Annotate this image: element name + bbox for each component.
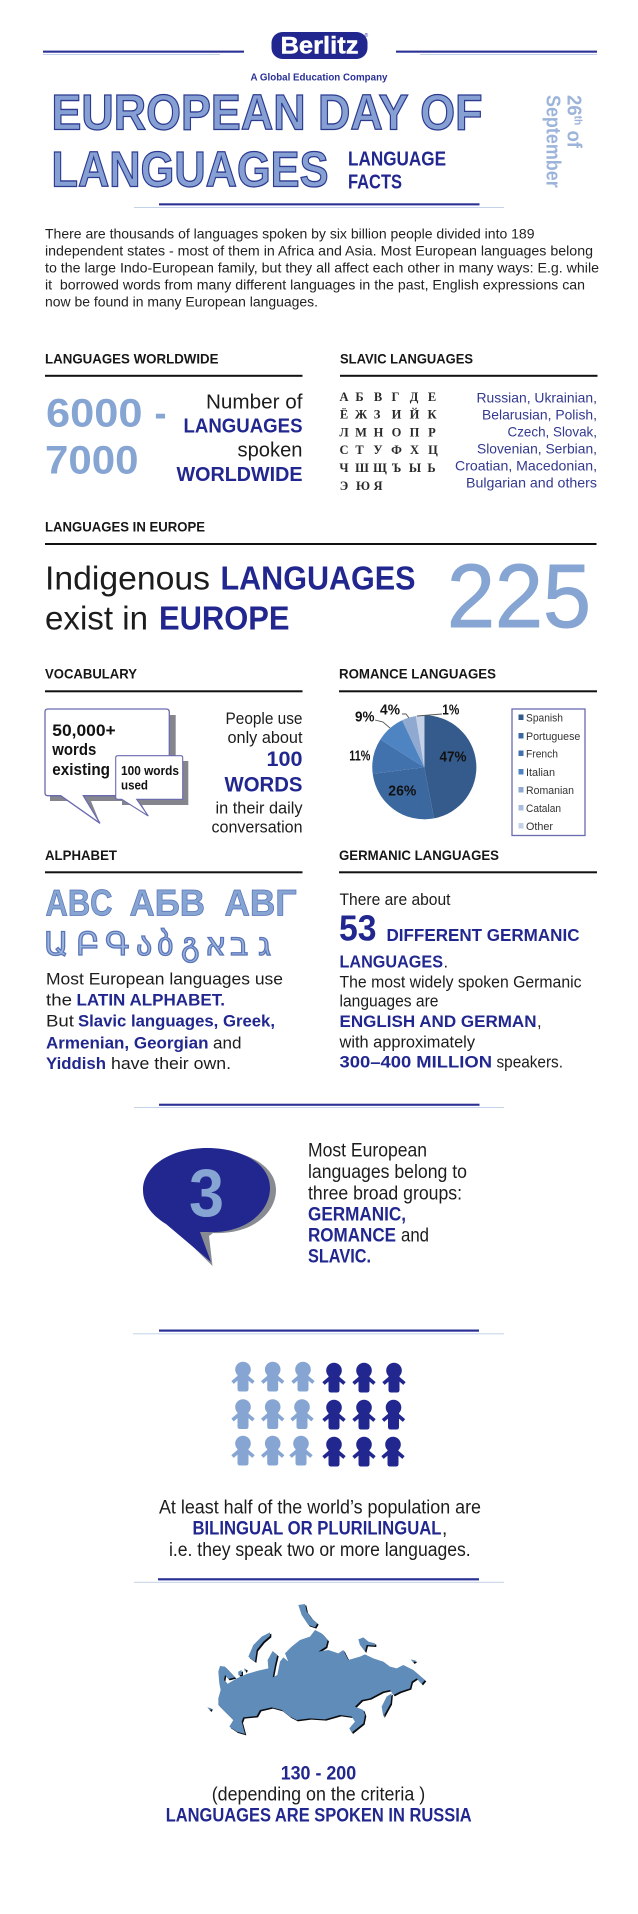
panel: languages worldwide [45, 350, 303, 486]
legend: Italian [526, 767, 555, 779]
outlined alphabets row 2: ב [230, 925, 248, 963]
cyrillic alphabet [339, 390, 438, 493]
statement: LANGUAGES [220, 560, 416, 597]
text block: 300–400 MILLION [340, 1053, 492, 1071]
caption: People use [226, 710, 302, 728]
text: Most European [308, 1140, 427, 1162]
legend: Portuguese [526, 731, 580, 743]
text block: languages are [340, 993, 438, 1011]
cyrillic alphabet: ЧШЩЪЫЬ [339, 461, 436, 475]
pie chart [349, 702, 476, 819]
caption [212, 710, 303, 836]
panel: vocabulary [45, 666, 303, 836]
outlined alphabets row 2: ბ [157, 925, 174, 963]
speech bubble large: 50,000+ [52, 722, 116, 740]
caption: conversation [212, 818, 302, 836]
outlined alphabets row 2: გ [181, 925, 200, 963]
caption: WORDS [224, 774, 302, 797]
pie chart: 1% [442, 702, 459, 718]
description: LANGUAGES [184, 415, 302, 437]
text: , [442, 1518, 447, 1539]
text: ROMANCE [308, 1225, 396, 1247]
text: BILINGUAL OR PLURILINGUAL [192, 1518, 442, 1539]
cyrillic alphabet: АБВГДЕ [339, 390, 436, 404]
statement: EUROPE [159, 600, 290, 637]
cyrillic alphabet: ЛМНОПР [339, 426, 436, 440]
panel: languages in russia [166, 1604, 472, 1827]
text block: The most widely spoken Germanic [340, 973, 582, 991]
text [166, 1762, 472, 1827]
subtitle: language facts [348, 148, 446, 193]
heading: LANGUAGES IN EUROPE [45, 519, 205, 535]
panel: languages in europe [45, 519, 596, 647]
intro paragraph: to the large Indo-European family, but they all affect each other in many ways: E.g. while [45, 260, 599, 276]
slavic language list: Slovenian, Serbian, [477, 440, 597, 456]
description [46, 969, 283, 1073]
text: SLAVIC. [308, 1246, 371, 1268]
description: Armenian, Georgian [46, 1033, 208, 1052]
outlined alphabets row 1 [46, 883, 296, 924]
icon: speech bubble with 3: 3 [189, 1155, 224, 1231]
date: 26th of September [542, 95, 584, 188]
slavic language list: Bulgarian and others [466, 474, 597, 490]
text block: . [444, 954, 448, 972]
legend: Romanian [526, 785, 574, 797]
heading: ALPHABET [45, 847, 117, 863]
caption: in their daily [216, 799, 303, 817]
heading: LANGUAGES WORLDWIDE [45, 350, 218, 366]
description: But [46, 1012, 74, 1031]
slavic language list: Croatian, Macedonian, [455, 457, 597, 473]
text [308, 1140, 467, 1268]
text block [339, 891, 582, 1071]
text block: , [537, 1013, 542, 1031]
header: logo and top rules [43, 32, 597, 59]
description: LATIN ALPHABET. [76, 991, 225, 1010]
text block: LANGUAGES [340, 952, 443, 972]
speech bubble small: 100 words [121, 764, 179, 778]
caption: 100 [266, 748, 302, 771]
heading: ROMANCE LANGUAGES [339, 666, 496, 682]
text block: ENGLISH AND GERMAN [340, 1013, 536, 1031]
speech bubble small: used [121, 778, 148, 792]
text block: speakers. [496, 1053, 563, 1071]
logo: Berlitz: ® [364, 32, 368, 39]
slavic language list: Russian, Ukrainian, [476, 389, 597, 405]
heading: GERMANIC LANGUAGES [339, 847, 499, 863]
pie chart: 11% [349, 748, 370, 764]
pie chart: 4% [380, 702, 400, 718]
pie chart: 26% [388, 784, 416, 800]
legend: French [526, 748, 558, 760]
outlined alphabets row 2 [44, 925, 271, 963]
date: 26th of September: 26 [562, 95, 584, 117]
cyrillic alphabet: СТУФХЦ [339, 443, 438, 457]
text block: with approximately [339, 1033, 476, 1051]
panel: romance languages [339, 666, 597, 836]
legend: Catalan [526, 803, 561, 815]
title [52, 83, 482, 197]
heading: VOCABULARY [45, 666, 138, 682]
text: LANGUAGES ARE SPOKEN IN RUSSIA [166, 1805, 472, 1827]
title: EUROPEAN DAY OF [52, 83, 482, 140]
description: the [46, 991, 72, 1010]
heading: SLAVIC LANGUAGES [340, 350, 473, 366]
description: Slavic languages, Greek, [78, 1012, 275, 1031]
outlined alphabets row 2: Բ [76, 925, 99, 963]
description: Yiddish [46, 1054, 106, 1073]
legend: Other [526, 821, 553, 833]
subtitle: language facts: LANGUAGE [348, 148, 446, 171]
logo: Berlitz: Berlitz [280, 32, 358, 59]
outlined alphabets row 1: ΑΒΓ [224, 883, 296, 924]
speech bubble small [116, 756, 188, 816]
icon: map of Russia [207, 1604, 426, 1735]
description [176, 391, 303, 486]
outlined alphabets row 1: АБВ [130, 883, 205, 924]
outlined alphabets row 2: א [205, 925, 226, 963]
text block: DIFFERENT GERMANIC [386, 925, 580, 945]
outlined alphabets row 1: ABC [46, 883, 112, 924]
date: 26th of September: th [572, 116, 584, 126]
panel: bilingual people [159, 1362, 481, 1561]
intro paragraph: There are thousands of languages spoken by six billion people divided into 189 [45, 226, 535, 242]
big number: 7000 [45, 438, 138, 482]
statement: exist in [45, 600, 148, 637]
description: spoken [238, 440, 302, 462]
pie chart: 9% [355, 710, 375, 726]
outlined alphabets row 2: Ա [44, 925, 69, 963]
intro paragraph: now be found in many European languages. [45, 294, 318, 310]
big number: 6000 [46, 392, 142, 436]
speech bubble large: existing [52, 761, 110, 779]
text: languages belong to [308, 1161, 467, 1183]
legend: Spanish [526, 712, 563, 724]
speech bubble large [45, 709, 176, 823]
title: LANGUAGES [52, 140, 328, 197]
description: WORLDWIDE [176, 464, 302, 486]
text: (depending on the criteria ) [212, 1784, 425, 1806]
text block: There are about [340, 891, 451, 909]
outlined alphabets row 2: Գ [105, 925, 129, 963]
panel: three language groups [143, 1140, 467, 1268]
description: have their own. [111, 1054, 231, 1073]
panel: slavic languages [339, 350, 598, 493]
intro paragraph: independent states - most of them in Africa and Asia. Most European languages belong [45, 242, 593, 258]
number 225: 225 [447, 547, 591, 647]
date: 26th of September: September [542, 95, 564, 188]
slavic language list: Belarusian, Polish, [482, 406, 597, 422]
big number [45, 392, 166, 482]
date: 26th of September: of [562, 125, 584, 148]
cyrillic alphabet: ЭЮЯ [340, 479, 383, 493]
speech bubble large: words [51, 741, 96, 759]
description: and [213, 1033, 242, 1052]
tagline: A Global Education Company [250, 72, 388, 84]
cyrillic alphabet: ЁЖЗИЙК [340, 408, 437, 422]
text: i.e. they speak two or more languages. [169, 1540, 471, 1561]
text: At least half of the world’s population are [159, 1497, 481, 1518]
panel: alphabet [44, 847, 302, 1073]
description: Most European languages use [46, 969, 283, 988]
legend [512, 709, 585, 836]
subtitle: language facts: FACTS [348, 170, 402, 193]
panel: germanic languages [339, 847, 597, 1071]
text [159, 1497, 481, 1561]
description: Number of [206, 391, 303, 413]
intro paragraph: it borrowed words from many different languages in the past, English expressions can [45, 277, 585, 293]
text: three broad groups: [308, 1182, 462, 1204]
text: GERMANIC, [308, 1204, 406, 1226]
outlined alphabets row 2: ג [258, 925, 271, 963]
icon: people grid [232, 1362, 404, 1466]
outlined alphabets row 2: ა [136, 925, 152, 963]
statement: Indigenous [45, 560, 210, 597]
pie chart: 47% [440, 750, 467, 766]
slavic language list: Czech, Slovak, [508, 423, 597, 439]
text block: 53 [339, 908, 376, 949]
text: 130 - 200 [281, 1762, 356, 1784]
caption: only about [228, 729, 303, 747]
text: and [401, 1225, 429, 1247]
slavic language list [455, 389, 597, 490]
big number: - [154, 392, 166, 436]
icon: speech bubble with 3 [143, 1148, 276, 1266]
intro paragraph [45, 226, 599, 310]
statement [45, 560, 416, 637]
